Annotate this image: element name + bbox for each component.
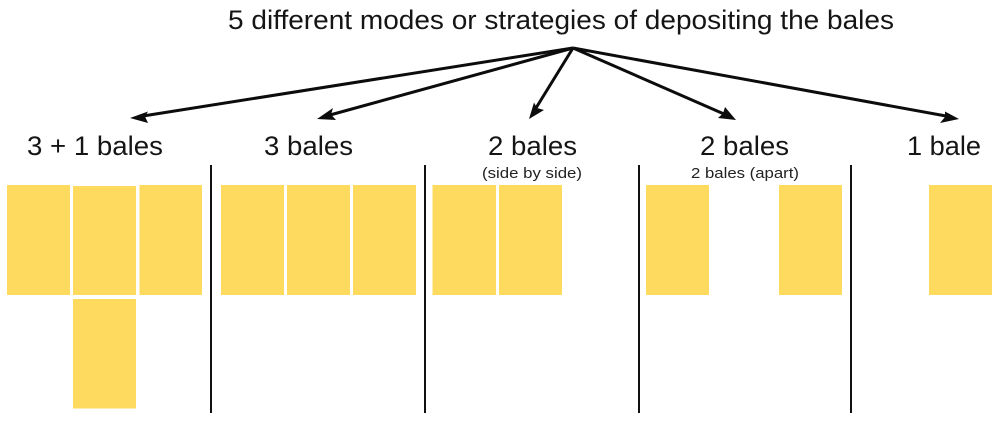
arrow: to 1 bale: [573, 48, 959, 123]
arrow: to 3 bales: [317, 48, 573, 120]
sublabel: side by side: (side by side): [482, 166, 582, 182]
label: 3 + 1 bales: 3 + 1 bales: [27, 131, 163, 161]
label: 2 bales side by side: 2 bales: [488, 131, 577, 161]
label: 3 bales: 3 bales: [264, 131, 353, 161]
dividers: [211, 165, 851, 413]
bales: 2 side by side: [432, 185, 562, 295]
arrow: to 3 + 1 bales: [130, 48, 573, 123]
arrow: to 2 bales apart: [573, 48, 736, 120]
sublabel: 2 bales apart: 2 bales (apart): [691, 166, 799, 182]
bales: 2 apart: [646, 185, 842, 295]
title: 5 different modes or strategies of depositing the bales: [228, 5, 894, 35]
bales: 3: [221, 185, 416, 295]
arrows from title to each mode: [130, 48, 959, 123]
arrow: to 2 bales side by side: [529, 48, 573, 119]
bale: 1: [929, 185, 992, 295]
label: 2 bales apart: 2 bales: [700, 131, 789, 161]
bales: 3 + 1: [7, 185, 202, 408]
label: 1 bale: 1 bale: [907, 131, 981, 161]
